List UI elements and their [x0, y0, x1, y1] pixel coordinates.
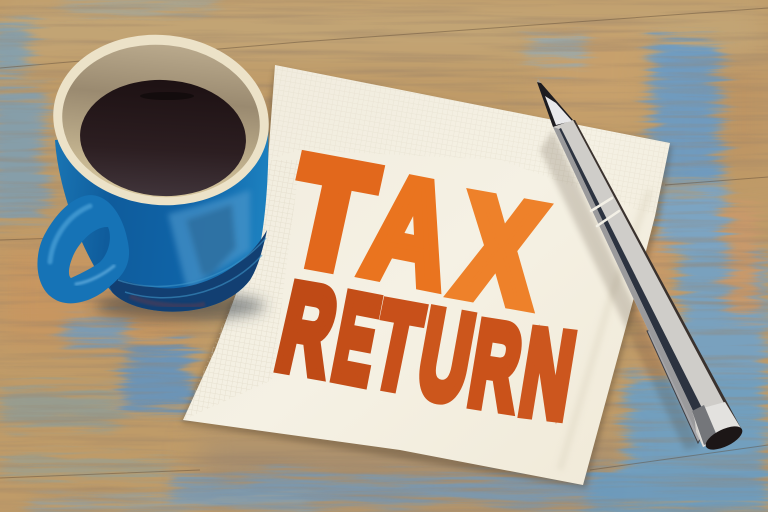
pen rings [591, 198, 619, 226]
napkin lettering: RETURN: R [267, 259, 347, 402]
napkin [183, 65, 670, 485]
napkin lettering: RETURN: N [513, 303, 583, 444]
icon: mug body [55, 120, 268, 312]
icon: mug rim [45, 24, 277, 216]
pen end band [692, 402, 742, 447]
napkin lettering: RETURN: E [324, 269, 388, 411]
mug base bands [105, 230, 267, 312]
napkin lettering: TAX: T [276, 127, 386, 302]
pen [537, 79, 746, 454]
pen barrel [553, 120, 740, 447]
napkin lettering: RETURN: T [364, 277, 431, 416]
pen end cap [702, 422, 746, 454]
icon: mug shadow [95, 292, 265, 320]
coffee mug [37, 24, 277, 320]
icon: coffee surface [77, 76, 249, 200]
mug reflection [168, 190, 250, 286]
napkin lettering: RETURN [267, 259, 583, 444]
pen dark reflection [559, 128, 702, 413]
napkin lettering: TAX: X [448, 167, 551, 335]
napkin lettering: RETURN: U [409, 284, 482, 429]
pen clip [647, 330, 706, 443]
pen shadow [540, 130, 700, 450]
napkin shadow [181, 68, 672, 488]
napkin lettering: TAX: A [352, 143, 467, 318]
napkin lettering: RETURN: R [462, 297, 529, 436]
napkin lettering: TAX [276, 127, 551, 335]
pen tip [537, 79, 573, 127]
pen grey side [553, 127, 703, 447]
pen right edge [573, 120, 742, 431]
icon: mug handle [37, 195, 129, 303]
